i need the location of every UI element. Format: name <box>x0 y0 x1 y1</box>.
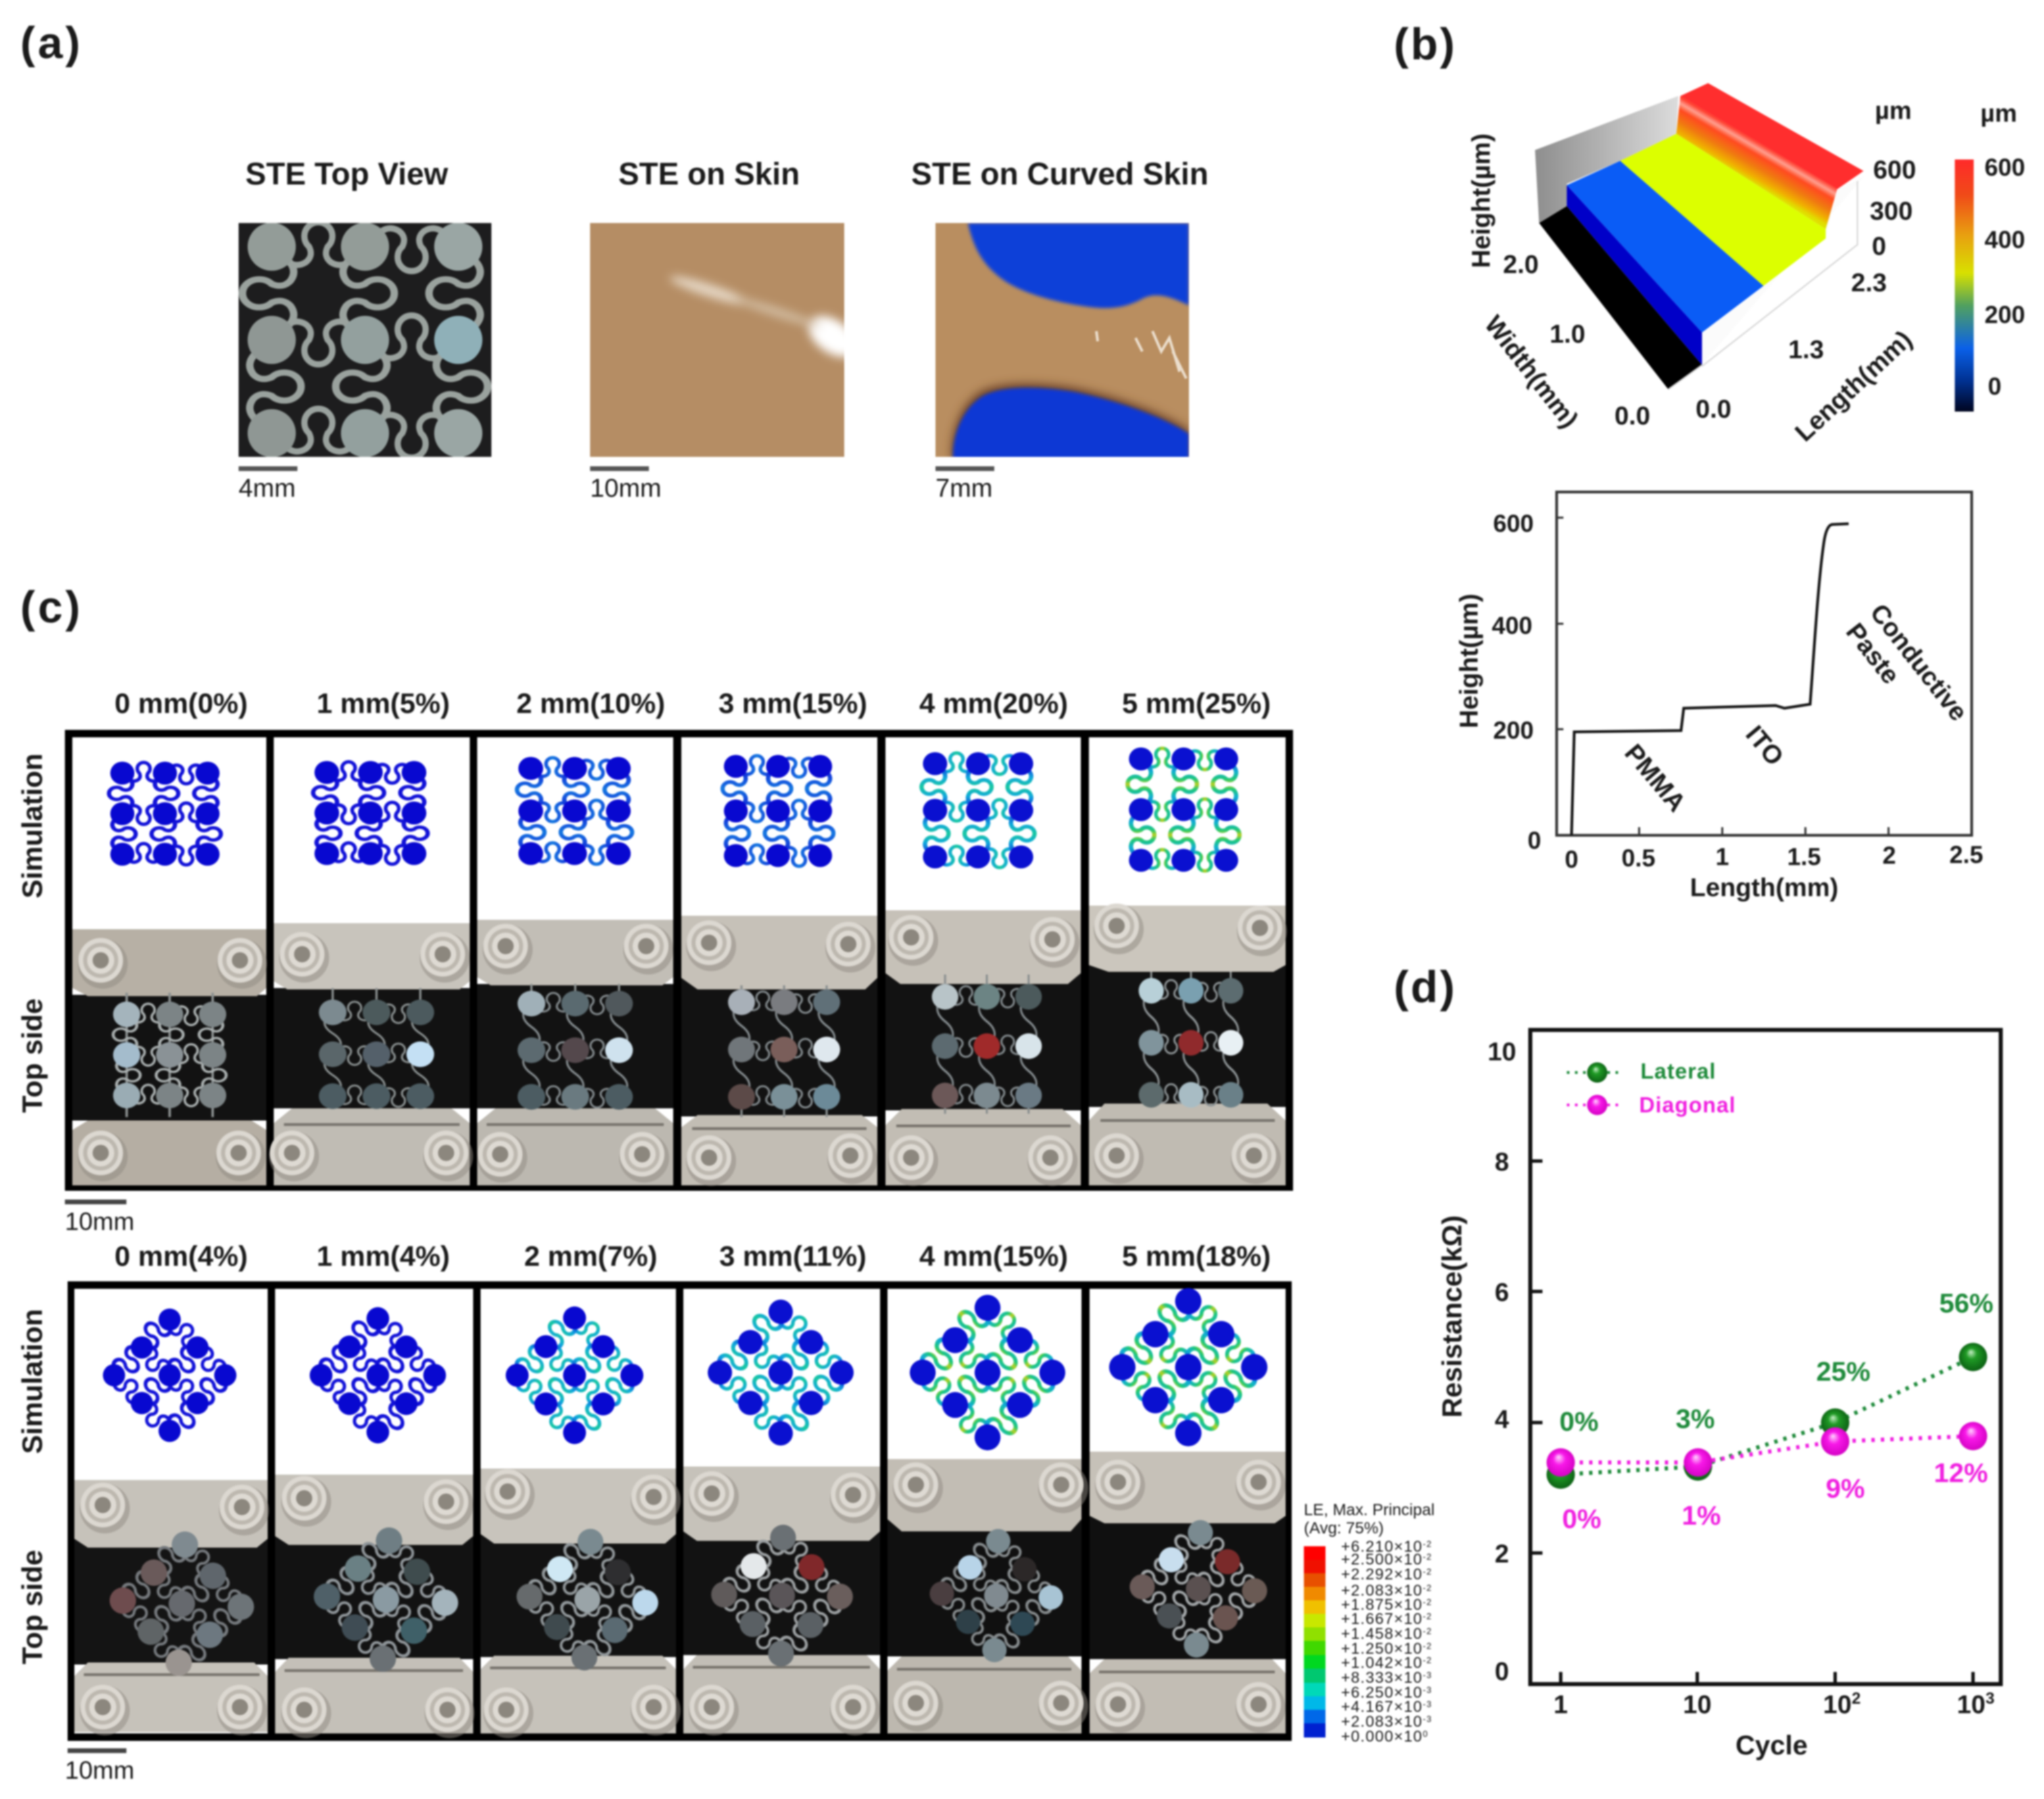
photo: 2 mm diagonal <box>481 1469 681 1738</box>
legend values: +1.875×10 <box>1341 1596 1423 1613</box>
3D axis labels: 2.0 <box>1503 251 1538 279</box>
3D axis labels: 600 <box>1873 156 1916 184</box>
diagonal percentage labels: 12% <box>1934 1458 1988 1488</box>
3D axis labels: 300 <box>1870 197 1913 226</box>
3D axis labels: 0 <box>1872 232 1887 261</box>
photo: 3 mm lateral <box>681 916 877 1186</box>
legend values: -2 <box>1423 1611 1432 1621</box>
diagonal percentage labels: 9% <box>1826 1474 1865 1504</box>
photo: 5 mm diagonal <box>1090 1452 1286 1733</box>
photos: diagonal stretch <box>74 1452 1286 1738</box>
3D axis labels: Length(mm) <box>1790 326 1918 447</box>
scale bar: 7mm: 7mm <box>935 474 992 503</box>
scale bar: 4mm: 4mm <box>239 474 295 503</box>
layer label: Conductive: Conductive <box>1864 599 1972 726</box>
lateral percentage labels <box>1559 1289 1993 1437</box>
side label: Simulation diagonal: Simulation <box>16 1309 48 1454</box>
y axis values: 10 <box>1488 1038 1516 1066</box>
chart legend: Diagonal <box>1639 1093 1736 1117</box>
legend values: +1.458×10 <box>1341 1625 1423 1642</box>
row titles: lateral strain: 4 mm(20%) <box>919 687 1068 719</box>
panel label: d: (d) <box>1394 962 1457 1012</box>
colour bar: 0 <box>1988 372 2001 400</box>
series: Diagonal <box>1547 1422 1987 1477</box>
y axis values: 2 <box>1494 1540 1509 1569</box>
panel c: lateral stretch series <box>16 687 1434 1784</box>
side label: Top side: Top side <box>16 998 48 1113</box>
row titles: lateral strain: 2 mm(10%) <box>516 687 665 719</box>
legend values: -3 <box>1423 1670 1432 1680</box>
photo: 1 mm diagonal <box>275 1475 474 1738</box>
x axis ticks: 2 <box>1882 841 1896 869</box>
photo: 2 mm lateral <box>477 920 673 1185</box>
image frame: diagonal <box>68 1281 1292 1741</box>
row titles: diagonal strain: 4 mm(15%) <box>919 1240 1068 1272</box>
legend values: +2.292×10 <box>1341 1565 1423 1583</box>
row titles: lateral strain <box>115 687 1271 719</box>
diagonal percentage labels: 1% <box>1682 1501 1721 1531</box>
legend subtitle: (Avg: 75%) <box>1304 1519 1384 1537</box>
photos: lateral stretch <box>72 904 1287 1186</box>
side label: Simulation: Simulation <box>16 754 48 898</box>
profile curve <box>1572 524 1849 835</box>
lateral percentage labels: 3% <box>1676 1404 1715 1434</box>
line chart: height profile <box>1455 492 1983 902</box>
simulations: diagonal stretch <box>97 1281 1274 1457</box>
colour bar: µm <box>1980 99 2017 127</box>
y axis values: 6 <box>1494 1279 1509 1307</box>
layer label: ITO: ITO <box>1740 720 1788 771</box>
panel label: b: (b) <box>1394 19 1457 69</box>
legend values: -3 <box>1423 1699 1432 1709</box>
colour bar: 600 <box>1985 153 2025 181</box>
photo: 3 mm diagonal <box>683 1467 880 1735</box>
legend values: +1.667×10 <box>1341 1610 1423 1627</box>
strain colour legend <box>1304 1501 1434 1745</box>
chart legend: Lateral <box>1640 1059 1716 1083</box>
legend values: +2.500×10 <box>1341 1550 1423 1568</box>
photo: STE on skin <box>590 223 865 457</box>
3D axis labels: µm <box>1875 97 1912 124</box>
legend values: -2 <box>1423 1583 1432 1593</box>
x axis title: Cycle <box>1736 1731 1807 1760</box>
image frame: lateral <box>65 730 1293 1191</box>
panel b: 3D surface profile <box>1455 83 2025 902</box>
colour bar <box>1955 99 2025 412</box>
legend values: +2.083×10 <box>1341 1712 1423 1730</box>
legend values: -3 <box>1423 1714 1432 1724</box>
simulations: lateral stretch <box>109 747 1240 872</box>
legend values: +6.250×10 <box>1341 1683 1423 1701</box>
scale bar: lateral 10mm: 10mm <box>65 1208 135 1235</box>
y axis values <box>1488 1038 1516 1686</box>
row titles: diagonal strain: 2 mm(7%) <box>525 1240 657 1272</box>
3D axis labels: 2.3 <box>1851 269 1887 297</box>
x axis ticks: 0.5 <box>1622 844 1655 872</box>
x axis ticks: 1 <box>1716 843 1729 870</box>
x axis values: 1 <box>1553 1691 1568 1719</box>
row titles: lateral strain: 5 mm(25%) <box>1122 687 1271 719</box>
legend values: -2 <box>1423 1552 1432 1562</box>
3D axis labels: Width(mm) <box>1479 311 1584 434</box>
scale bar: 10mm: 10mm <box>590 474 662 503</box>
x axis ticks: 1.5 <box>1787 843 1821 870</box>
layer label: Paste: Paste <box>1840 618 1905 689</box>
photo: STE on curved skin <box>935 223 1189 460</box>
layer label: PMMA: PMMA <box>1619 739 1691 818</box>
legend values: -2 <box>1423 1597 1432 1607</box>
lateral percentage labels: 0% <box>1559 1407 1599 1437</box>
legend values: +1.250×10 <box>1341 1640 1423 1657</box>
legend values: -2 <box>1423 1567 1432 1577</box>
series: Lateral <box>1547 1343 1987 1489</box>
y axis ticks <box>1492 510 1541 854</box>
heading: STE Top View: STE Top View <box>245 156 448 191</box>
panel label: c: (c) <box>20 582 83 632</box>
x axis values <box>1553 1690 1995 1719</box>
3D axis labels: 1.3 <box>1788 336 1824 364</box>
legend values: +6.210×10 <box>1341 1537 1423 1555</box>
y axis ticks: 0 <box>1528 827 1541 854</box>
row titles: diagonal strain: 5 mm(18%) <box>1122 1240 1271 1272</box>
3D axis labels: 1.0 <box>1550 320 1585 349</box>
panel d: resistance vs cycle chart <box>1436 1030 2001 1760</box>
y axis title: Height(µm) <box>1455 593 1484 729</box>
legend values: -2 <box>1423 1626 1432 1636</box>
diagonal percentage labels: 0% <box>1562 1504 1601 1534</box>
legend values: +8.333×10 <box>1341 1669 1423 1686</box>
row titles: diagonal strain: 0 mm(4%) <box>115 1240 247 1272</box>
row titles: lateral strain: 3 mm(15%) <box>719 687 867 719</box>
row titles: diagonal strain <box>115 1240 1271 1272</box>
y axis ticks: 200 <box>1493 716 1534 744</box>
3D axis labels: Height(µm) <box>1467 133 1496 268</box>
y axis values: 4 <box>1494 1406 1509 1434</box>
x axis ticks: 0 <box>1565 845 1578 873</box>
scale bar: diagonal 10mm: 10mm <box>65 1756 135 1784</box>
x axis ticks: 2.5 <box>1949 841 1983 868</box>
legend values: -2 <box>1423 1641 1432 1651</box>
legend colour bands <box>1304 1546 1325 1738</box>
row titles: diagonal strain: 3 mm(11%) <box>719 1240 867 1272</box>
lateral percentage labels: 56% <box>1939 1289 1993 1319</box>
lateral percentage labels: 25% <box>1816 1357 1870 1387</box>
x axis values: 2 <box>1851 1690 1861 1708</box>
diagonal percentage labels <box>1562 1458 1988 1534</box>
x axis values: 10 <box>1823 1691 1851 1719</box>
photo: 1 mm lateral <box>269 923 473 1185</box>
3D surface plot <box>1535 83 1864 389</box>
colour bar: 200 <box>1985 301 2025 328</box>
y axis ticks: 400 <box>1492 612 1532 639</box>
legend values: +1.042×10 <box>1341 1654 1423 1671</box>
photo: 4 mm diagonal <box>887 1459 1088 1733</box>
legend values: 0 <box>1423 1729 1428 1739</box>
y axis ticks: 600 <box>1493 510 1534 537</box>
photo: 4 mm lateral <box>885 910 1081 1186</box>
photo: 0 mm lateral <box>72 929 267 1185</box>
row titles: diagonal strain: 1 mm(4%) <box>317 1240 449 1272</box>
row titles: lateral strain: 1 mm(5%) <box>317 687 449 719</box>
x axis title: Length(mm) <box>1690 874 1839 902</box>
legend title: LE, Max. Principal <box>1304 1501 1434 1519</box>
x axis ticks <box>1565 841 1983 873</box>
legend values: +2.083×10 <box>1341 1581 1423 1599</box>
chart legend <box>1567 1059 1736 1117</box>
x axis values: 10 <box>1683 1691 1711 1719</box>
x axis values: 10 <box>1957 1691 1985 1719</box>
y axis values: 8 <box>1494 1148 1509 1177</box>
legend values: -2 <box>1423 1655 1432 1665</box>
y axis values: 0 <box>1494 1658 1509 1686</box>
3D axis labels <box>1467 97 1918 447</box>
legend values: +4.167×10 <box>1341 1698 1423 1715</box>
panel label: a: (a) <box>20 18 83 68</box>
row titles: lateral strain: 0 mm(0%) <box>115 687 247 719</box>
legend values <box>1341 1537 1432 1745</box>
side label: Top side diagonal: Top side <box>16 1550 48 1665</box>
heading: STE on Curved Skin: STE on Curved Skin <box>911 156 1209 191</box>
panel a: STE photographs <box>239 156 1209 503</box>
3D axis labels: 0.0 <box>1696 395 1731 424</box>
photo: STE top view <box>239 222 491 458</box>
legend values: +0.000×10 <box>1341 1727 1423 1745</box>
heading: STE on Skin: STE on Skin <box>618 156 800 191</box>
legend values: -3 <box>1423 1685 1432 1695</box>
photo: 5 mm lateral <box>1089 904 1287 1185</box>
x axis values: 3 <box>1985 1690 1995 1708</box>
3D axis labels: 0.0 <box>1615 402 1650 430</box>
colour bar: 400 <box>1985 226 2025 253</box>
chart frame and ticks <box>1530 1030 2001 1684</box>
legend values: -2 <box>1423 1539 1432 1549</box>
photo: 0 mm diagonal <box>74 1480 269 1735</box>
y axis title: Resistance(kΩ) <box>1436 1215 1467 1418</box>
